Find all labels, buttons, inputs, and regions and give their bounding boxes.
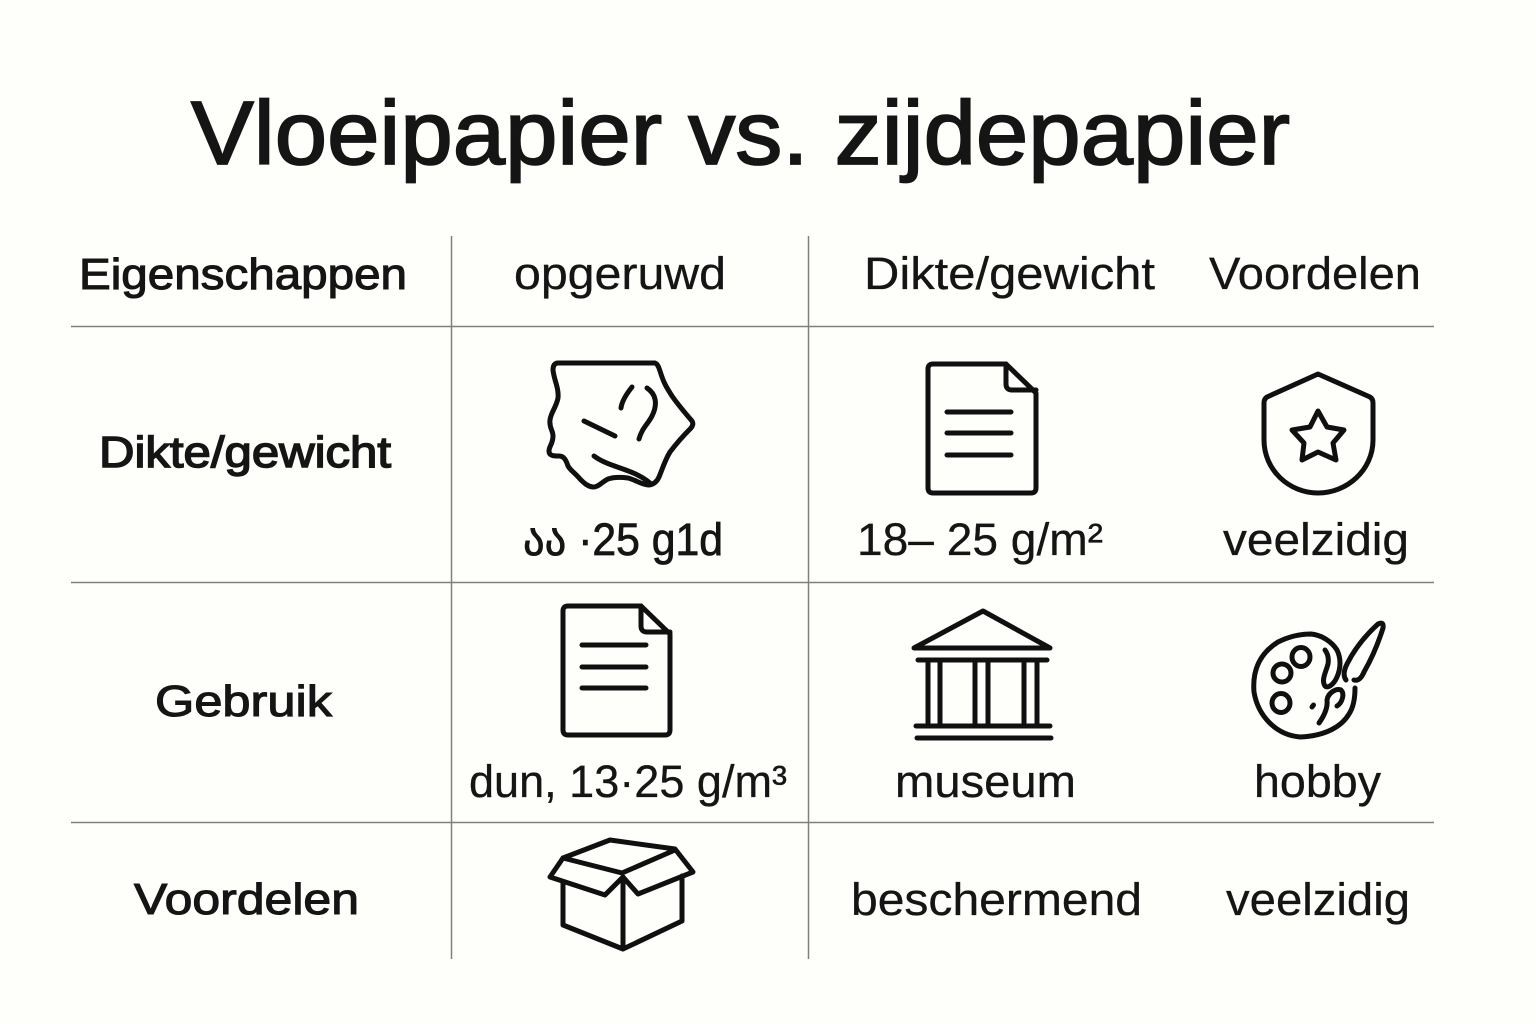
value: zijdepapier weight: 18– 25 g/m² (857, 514, 1103, 565)
icon: open box (550, 840, 693, 949)
header: Dikte/gewicht: Dikte/gewicht (864, 248, 1156, 299)
row: Dikte/gewicht (99, 363, 1409, 565)
table grid (71, 236, 1434, 959)
row label: Dikte/gewicht (99, 428, 391, 477)
row: Voordelen (134, 840, 1410, 949)
icon: document (928, 364, 1036, 493)
icon: document (563, 606, 670, 735)
value: veelzidig: veelzidig (1223, 514, 1409, 565)
value: vloeipapier weight: აა ·25 g1d (523, 514, 723, 565)
value: dun: dun, 13·25 g/m³ (469, 756, 787, 807)
value: veelzidig: veelzidig (1226, 874, 1410, 925)
value: museum: museum (895, 756, 1076, 807)
value: hobby: hobby (1254, 756, 1382, 807)
header: Eigenschappen: Eigenschappen (79, 250, 407, 299)
header row (79, 248, 1421, 299)
row label: Gebruik (155, 677, 333, 726)
icon: crumpled paper (549, 363, 693, 487)
row label: Voordelen (134, 875, 359, 924)
icon: museum (914, 611, 1051, 738)
icon: shield with star (1264, 374, 1373, 493)
value: beschermend: beschermend (851, 874, 1142, 925)
header: opgeruwd: opgeruwd (514, 248, 726, 299)
row: Gebruik (155, 606, 1383, 807)
icon: palette and brush (1254, 623, 1383, 737)
header: Voordelen: Voordelen (1209, 248, 1421, 299)
title: Vloeipapier vs. zijdepapier (191, 84, 1290, 184)
